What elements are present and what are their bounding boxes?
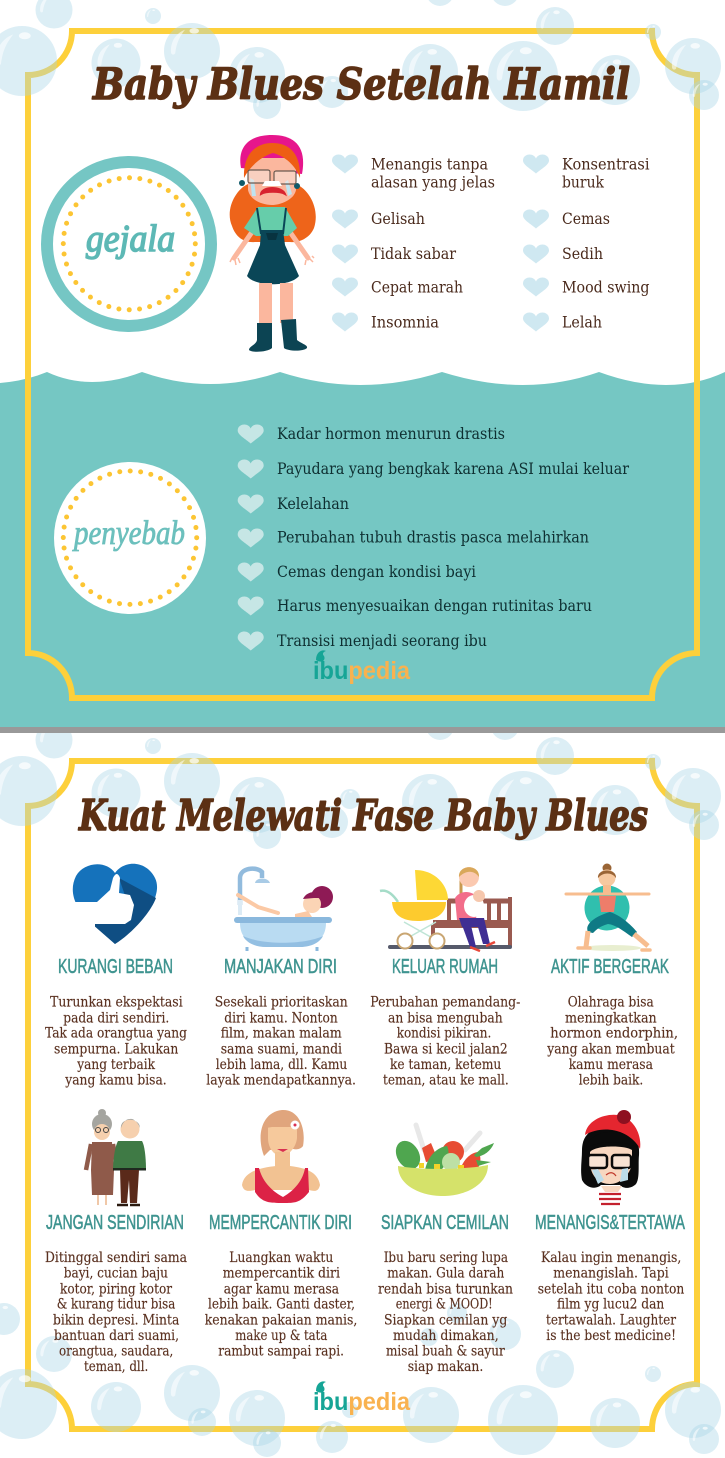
text block: mempercantik diri — [223, 1266, 341, 1282]
text block: film yg lucu2 dan — [557, 1297, 664, 1313]
card: keluar rumah — [370, 867, 521, 1088]
icon: crying girl with red beret — [581, 1110, 640, 1206]
text block: Olahraga bisa — [568, 995, 654, 1011]
illustration: crying girl — [230, 135, 316, 352]
text block: meningkatkan — [565, 1010, 657, 1026]
text block: lebih baik. Ganti daster, — [208, 1297, 355, 1313]
text block: ke taman, ketemu — [390, 1057, 501, 1073]
teal wave background — [0, 372, 725, 728]
text block — [206, 995, 356, 1088]
text block: kotor, piring kotor — [60, 1281, 172, 1297]
card: siapkan cemilan — [378, 1125, 513, 1375]
text block: bayi, cucian baju — [64, 1266, 168, 1282]
card: mempercantik diri — [205, 1110, 357, 1359]
text block: energi & MOOD! — [396, 1297, 493, 1313]
card: kurangi beban — [45, 864, 187, 1088]
text block: teman, dll. — [84, 1359, 148, 1375]
list: gejala symptoms: Mood swing — [562, 278, 650, 296]
text block: setelah itu coba nonton — [538, 1281, 684, 1297]
text block: sempurna. Lakukan — [54, 1041, 178, 1057]
panel 1 bubbles — [0, 0, 721, 119]
text block: Luangkan waktu — [229, 1250, 333, 1266]
text block: kenakan pakaian manis, — [205, 1312, 357, 1328]
badge: penyebab: penyebab — [72, 515, 185, 552]
heading: KELUAR RUMAH — [392, 956, 498, 978]
icon: yoga pose on ball — [566, 864, 650, 951]
list: penyebab causes: Kelelahan — [277, 495, 349, 513]
list: gejala symptoms: Sedih — [562, 245, 603, 263]
icon: woman in bathtub — [234, 869, 333, 951]
text block: Sesekali prioritaskan — [215, 995, 348, 1011]
text block: kondisi pikiran. — [397, 1026, 491, 1042]
text block: orangtua, saudara, — [59, 1343, 173, 1359]
text block: & kurang tidur bisa — [57, 1297, 175, 1313]
text block: makan. Gula darah — [387, 1266, 504, 1282]
grey divider band — [0, 727, 725, 733]
list: gejala symptoms: Konsentrasi — [562, 156, 650, 174]
icon: stroller and mother on bench — [380, 867, 512, 951]
list: penyebab causes: Perubahan tubuh drastis pasca melahirkan — [277, 528, 589, 546]
text block — [45, 995, 187, 1088]
list: penyebab causes: Cemas dengan kondisi bayi — [277, 563, 476, 581]
list: gejala symptoms: Menangis tanpa — [371, 156, 488, 174]
badge: gejala: gejala — [86, 218, 175, 260]
text block — [538, 1250, 684, 1344]
panel 2 frame — [28, 761, 697, 1429]
text block: Kalau ingin menangis, — [541, 1250, 681, 1266]
text block: yang kamu bisa. — [64, 1072, 167, 1088]
text block: yang terbaik — [76, 1057, 156, 1073]
icon: salad bowl — [391, 1125, 494, 1196]
list: penyebab causes: Harus menyesuaikan dengan rutinitas baru — [277, 597, 592, 615]
text block: is the best medicine! — [546, 1328, 676, 1344]
panel 1 frame — [28, 31, 697, 698]
text block: layak mendapatkannya. — [206, 1072, 356, 1088]
text block: Ibu baru sering lupa — [384, 1250, 508, 1266]
list: gejala symptoms: Lelah — [562, 314, 602, 332]
heading: AKTIF BERGERAK — [551, 956, 669, 978]
card: aktif bergerak — [546, 864, 678, 1088]
list: gejala symptoms: Cepat marah — [371, 278, 463, 296]
text block: Bawa si kecil jalan2 — [384, 1041, 508, 1057]
heading: MEMPERCANTIK DIRI — [209, 1212, 352, 1234]
list: gejala symptoms: Cemas — [562, 210, 610, 228]
heading: MANJAKAN DIRI — [224, 956, 337, 978]
text block: yang akan membuat — [546, 1041, 675, 1057]
text block: pada diri sendiri. — [63, 1010, 169, 1026]
list: penyebab causes: Payudara yang bengkak karena ASI mulai keluar — [277, 460, 630, 478]
panel 2 bubbles — [0, 712, 721, 1457]
logo: ibupedia top: ibupedia — [313, 657, 411, 685]
list: penyebab causes — [238, 424, 630, 650]
list: gejala symptoms: Tidak sabar — [371, 245, 457, 263]
icon: woman with bob hair — [242, 1110, 320, 1203]
list: gejala symptoms — [332, 154, 650, 332]
text block: an bisa mengubah — [388, 1010, 503, 1026]
heading: JANGAN SENDIRIAN — [46, 1212, 184, 1234]
badge: gejala — [47, 162, 211, 326]
list: penyebab causes: Transisi menjadi seorang ibu — [277, 632, 487, 650]
title: Baby Blues Setelah Hamil: Baby Blues Setelah Hamil — [91, 60, 630, 110]
text block: bikin depresi. Minta — [53, 1312, 179, 1328]
text block: lebih baik. — [579, 1072, 643, 1088]
badge: penyebab — [54, 462, 206, 614]
text block: agar kamu merasa — [224, 1281, 339, 1297]
list: penyebab causes: Kadar hormon menurun drastis — [277, 425, 505, 443]
list: gejala symptoms: Insomnia — [371, 314, 439, 332]
text block: diri kamu. Nonton — [224, 1010, 338, 1026]
icon: elderly couple — [86, 1109, 146, 1205]
text block: hormon endorphin, — [550, 1026, 678, 1042]
text block: Perubahan pemandang- — [370, 995, 521, 1011]
text block: bantuan dari suami, — [54, 1328, 179, 1344]
text block — [45, 1250, 187, 1375]
card: menangis dan tertawa — [535, 1110, 685, 1344]
card: jangan sendirian — [45, 1109, 187, 1375]
text block: rambut sampai rapi. — [218, 1343, 344, 1359]
list: gejala symptoms: alasan yang jelas — [371, 174, 495, 192]
text block: mudah dimakan, — [393, 1328, 499, 1344]
text block: menangislah. Tapi — [553, 1266, 669, 1282]
list: gejala symptoms: buruk — [562, 174, 605, 192]
text block — [205, 1250, 357, 1359]
text block: Tak ada orangtua yang — [45, 1026, 187, 1042]
text block: sama suami, mandi — [221, 1041, 343, 1057]
heading: KURANGI BEBAN — [58, 956, 173, 978]
text block: film, makan malam — [221, 1026, 342, 1042]
text block: make up & tata — [235, 1328, 327, 1344]
text block: rendah bisa turunkan — [378, 1281, 513, 1297]
text block: kamu merasa — [569, 1057, 653, 1073]
text block — [546, 995, 678, 1088]
text block — [378, 1250, 513, 1375]
icon: heart thumbs up — [60, 864, 157, 944]
text block: teman, atau ke mall. — [383, 1072, 509, 1088]
list: gejala symptoms: Gelisah — [371, 210, 425, 228]
text block: Ditinggal sendiri sama — [45, 1250, 187, 1266]
text block: misal buah & sayur — [386, 1343, 505, 1359]
text block: tertawalah. Laughter — [546, 1312, 676, 1328]
text block — [370, 995, 521, 1088]
heading: SIAPKAN CEMILAN — [381, 1212, 509, 1234]
text block: lebih lama, dll. Kamu — [216, 1057, 347, 1073]
logo: ibupedia bottom: ibupedia — [313, 1388, 411, 1416]
text block: Siapkan cemilan yg — [384, 1312, 507, 1328]
text block: siap makan. — [408, 1359, 483, 1375]
card: manjakan diri — [206, 869, 356, 1088]
text block: Turunkan ekspektasi — [50, 995, 183, 1011]
